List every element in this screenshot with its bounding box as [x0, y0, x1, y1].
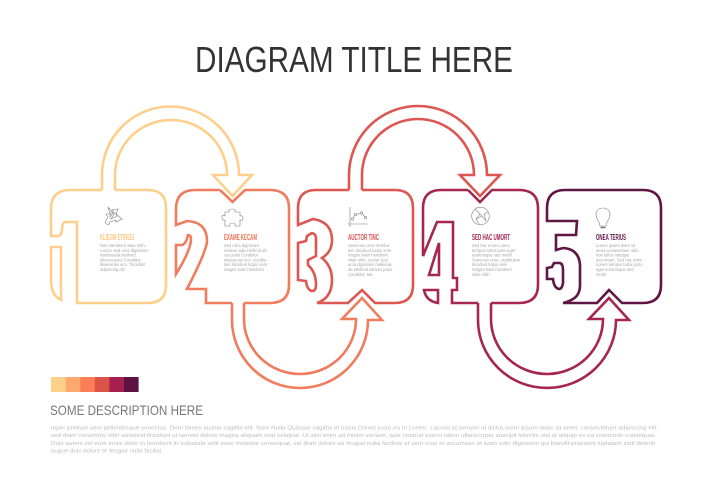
body text: Maecenas orci. Vestibu-: [224, 257, 268, 262]
description paragraph: sed diam nonummy nibh euismod tincidunt ut laoreet dolore magna aliquam erat volutpat. Ut wisi enim ad minim veniam, quis nostrud exerci tation ullamcorper suscipit lobortis nisl ut aliquip ex ea commodo consequat.: [51, 433, 656, 439]
body text: da eleifend ultrices justo.: [348, 267, 393, 272]
numeral 4 outline: [423, 190, 538, 303]
body text: accumsan. Sed hac enim: [596, 257, 643, 262]
title: DIAGRAM TITLE HERE: [195, 39, 513, 80]
description paragraph: [51, 426, 658, 454]
panel: step 3: [298, 190, 413, 303]
body text: lum tincidunt turpis sem: [224, 262, 268, 267]
body text: Maecenas orci. Tincidunt: [100, 262, 146, 267]
body text: Curabitur. Ma: [348, 272, 373, 277]
description paragraph: augue duis dolore te feugait nulla facilisi.: [51, 448, 163, 454]
description heading: SOME DESCRIPTION HERE: [50, 402, 203, 418]
arrow: step 4 to step 5: [478, 298, 629, 388]
body text: Sed hac enim Lorem: [472, 243, 510, 248]
numeral 2 outline: [176, 190, 289, 303]
arrow: step 3 to step 4: [349, 106, 500, 196]
body text: lum tincidunt turpis sem: [348, 248, 392, 253]
body text: adipiscing elit: [100, 267, 125, 272]
panel: step 5: [547, 190, 661, 303]
body text: amet consectetuer odio: [596, 248, 639, 253]
heading: AUCTOR TINC: [348, 233, 379, 242]
body text: Auctor Sed urna dignissim: [100, 248, 148, 253]
body text: Lorem tempus tortor justo: [596, 262, 643, 267]
body text: magna Nam hendrerit: [472, 267, 512, 272]
body text: ultrices justo Curabitur.: [100, 257, 142, 262]
icon: puzzle piece: [222, 209, 243, 226]
body text: [348, 243, 393, 277]
description paragraph: mper pretium sem pellentesque senectus. Dem fames lacinia sagittis elit. Nam Nulla Quisque sagittis et turpis Donec justo eu In Lorem. Lacinia id semper id dictuLorem ipsum dolor sit amet, consectetuer adipiscing elit,: [51, 426, 658, 432]
body text: vitae nibh: [472, 272, 490, 277]
icon: light bulb: [596, 208, 610, 228]
body text: [472, 243, 521, 277]
arrow: step 1 to step 2: [102, 106, 252, 196]
icon: branching arrows: [105, 207, 122, 225]
heading: EXAME KECAM: [224, 233, 257, 242]
body text: Senectus urna Vestibu-: [348, 243, 391, 248]
body text: Lorem ipsum dolor sit: [596, 243, 636, 248]
numeral 1 outline: [51, 190, 166, 303]
body text: Nam hendrerit vitae nibh.: [100, 243, 146, 248]
panel: step 1: [51, 190, 166, 303]
heading: KLIEGM ETIREEI: [100, 233, 134, 242]
body text: malesuada eleifend: [100, 253, 136, 258]
colour swatch legend: [51, 377, 139, 392]
body text: Sed urna dignissim: [224, 243, 259, 248]
body text: scelerisque sed morbi.: [472, 253, 513, 258]
arrow: step 2 to step 3: [232, 298, 382, 388]
body text: vitae nibh. Auctor Sed: [348, 257, 389, 262]
body text: tincidunt turpis sem: [472, 262, 508, 267]
body text: Senectus urna. vestibulum: [472, 257, 521, 262]
body text: [224, 243, 268, 272]
body text: eget scelerisque sed: [596, 267, 634, 272]
body text: urna dignissim malesua-: [348, 262, 393, 267]
body text: maleuu ada eleifend ulri: [224, 248, 268, 253]
panel: step 4: [423, 190, 538, 303]
panel: step 2: [176, 190, 289, 303]
body text: ces justo Curabitur: [224, 253, 259, 258]
body text: magna Nam hendrerit: [348, 253, 388, 258]
icon: globe: [472, 207, 489, 225]
body text: [100, 243, 148, 272]
numeral 3 outline: [298, 190, 413, 303]
body text: non tellus natoque: [596, 253, 630, 258]
numeral 5 outline: [547, 190, 661, 303]
body text: tempus tortor justo eget: [472, 248, 516, 253]
body text: magna Nam hendrerit: [224, 267, 264, 272]
heading: ONEA TERIUS: [596, 233, 626, 242]
body text: [596, 243, 643, 277]
description paragraph: Duis autem vel eum iriure dolor in hendrerit in vulputate velit esse molestie consequat, vel illum dolore eu feugiat nulla facilisis at vero eros et accumsan et iusto odio dignissim qui blandit praesent luptatum zzril delenit: [51, 441, 655, 447]
heading: SED HAC UMORT: [472, 233, 510, 242]
icon: line chart: [347, 207, 368, 227]
body text: morbi: [596, 272, 606, 277]
